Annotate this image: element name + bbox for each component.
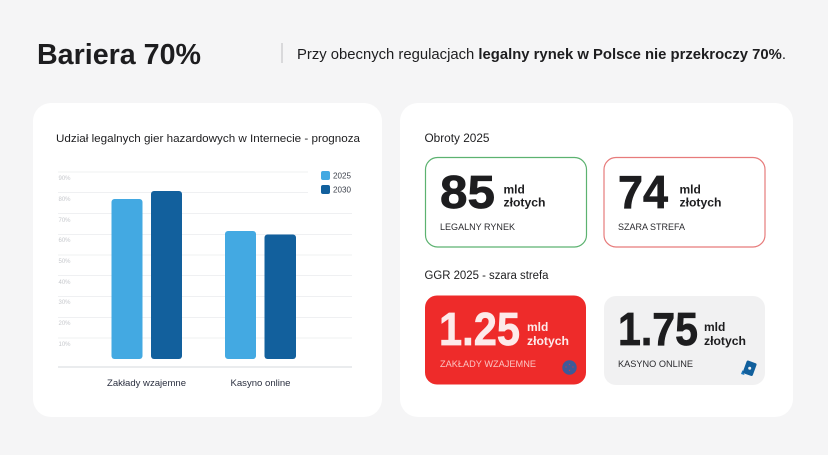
icon: cards	[741, 360, 757, 376]
y axis labels: 40%	[58, 280, 71, 286]
y axis labels: 80%	[58, 197, 71, 203]
x axis labels: Kasyno online	[230, 378, 290, 389]
card: kasyno online: złotych	[704, 334, 746, 348]
legend: 2025	[333, 172, 352, 180]
card: kasyno online: mld	[704, 320, 725, 334]
card: zakłady wzajemne: 1.25	[439, 303, 520, 355]
card: zakłady wzajemne: złotych	[527, 334, 569, 348]
chart heading: Udział legalnych gier hazardowych w Internecie - prognoza	[56, 133, 361, 145]
y axis labels: 70%	[58, 218, 71, 224]
y axis labels: 50%	[58, 259, 71, 265]
card: legalny rynek: 85	[440, 166, 495, 218]
panel: figures	[400, 103, 793, 417]
y axis labels: 20%	[58, 321, 71, 327]
y axis labels	[58, 176, 71, 348]
icon: football	[562, 360, 577, 375]
card: zakłady wzajemne: mld	[527, 320, 548, 334]
card: kasyno online: KASYNO ONLINE	[618, 359, 693, 370]
card: szara strefa: 74	[618, 166, 668, 218]
card: legalny rynek: LEGALNY RYNEK	[440, 222, 516, 233]
card: szara strefa	[604, 158, 765, 247]
card: szara strefa: SZARA STREFA	[618, 222, 686, 233]
legend	[321, 171, 352, 194]
bars: Zakłady wzajemne	[112, 191, 182, 359]
bars: Kasyno online	[225, 231, 296, 359]
x axis labels	[107, 378, 290, 389]
card: szara strefa: złotych	[680, 196, 722, 210]
x axis labels: Zakłady wzajemne	[107, 378, 186, 389]
card: legalny rynek	[426, 158, 586, 247]
title: Bariera 70%	[37, 39, 201, 71]
legend: 2030	[333, 186, 352, 194]
heading: Obroty 2025: Obroty 2025	[424, 133, 490, 145]
card: zakłady wzajemne	[425, 296, 586, 384]
card: legalny rynek: mld	[504, 182, 525, 196]
y axis labels: 90%	[58, 176, 71, 182]
card: zakłady wzajemne: ZAKŁADY WZAJEMNE	[440, 359, 536, 370]
y axis labels: 30%	[58, 300, 71, 306]
card: kasyno online: 1.75	[618, 303, 698, 355]
card: szara strefa: mld	[680, 182, 701, 196]
subtitle: Przy obecnych regulacjach legalny rynek w Polsce nie przekroczy 70%.	[297, 46, 786, 63]
heading: GGR 2025: GGR 2025 - szara strefa	[424, 270, 549, 282]
card: kasyno online	[604, 296, 765, 385]
card: legalny rynek: złotych	[504, 196, 546, 210]
panel: chart	[33, 103, 382, 417]
y axis labels: 10%	[58, 342, 71, 348]
y axis labels: 60%	[58, 238, 71, 244]
